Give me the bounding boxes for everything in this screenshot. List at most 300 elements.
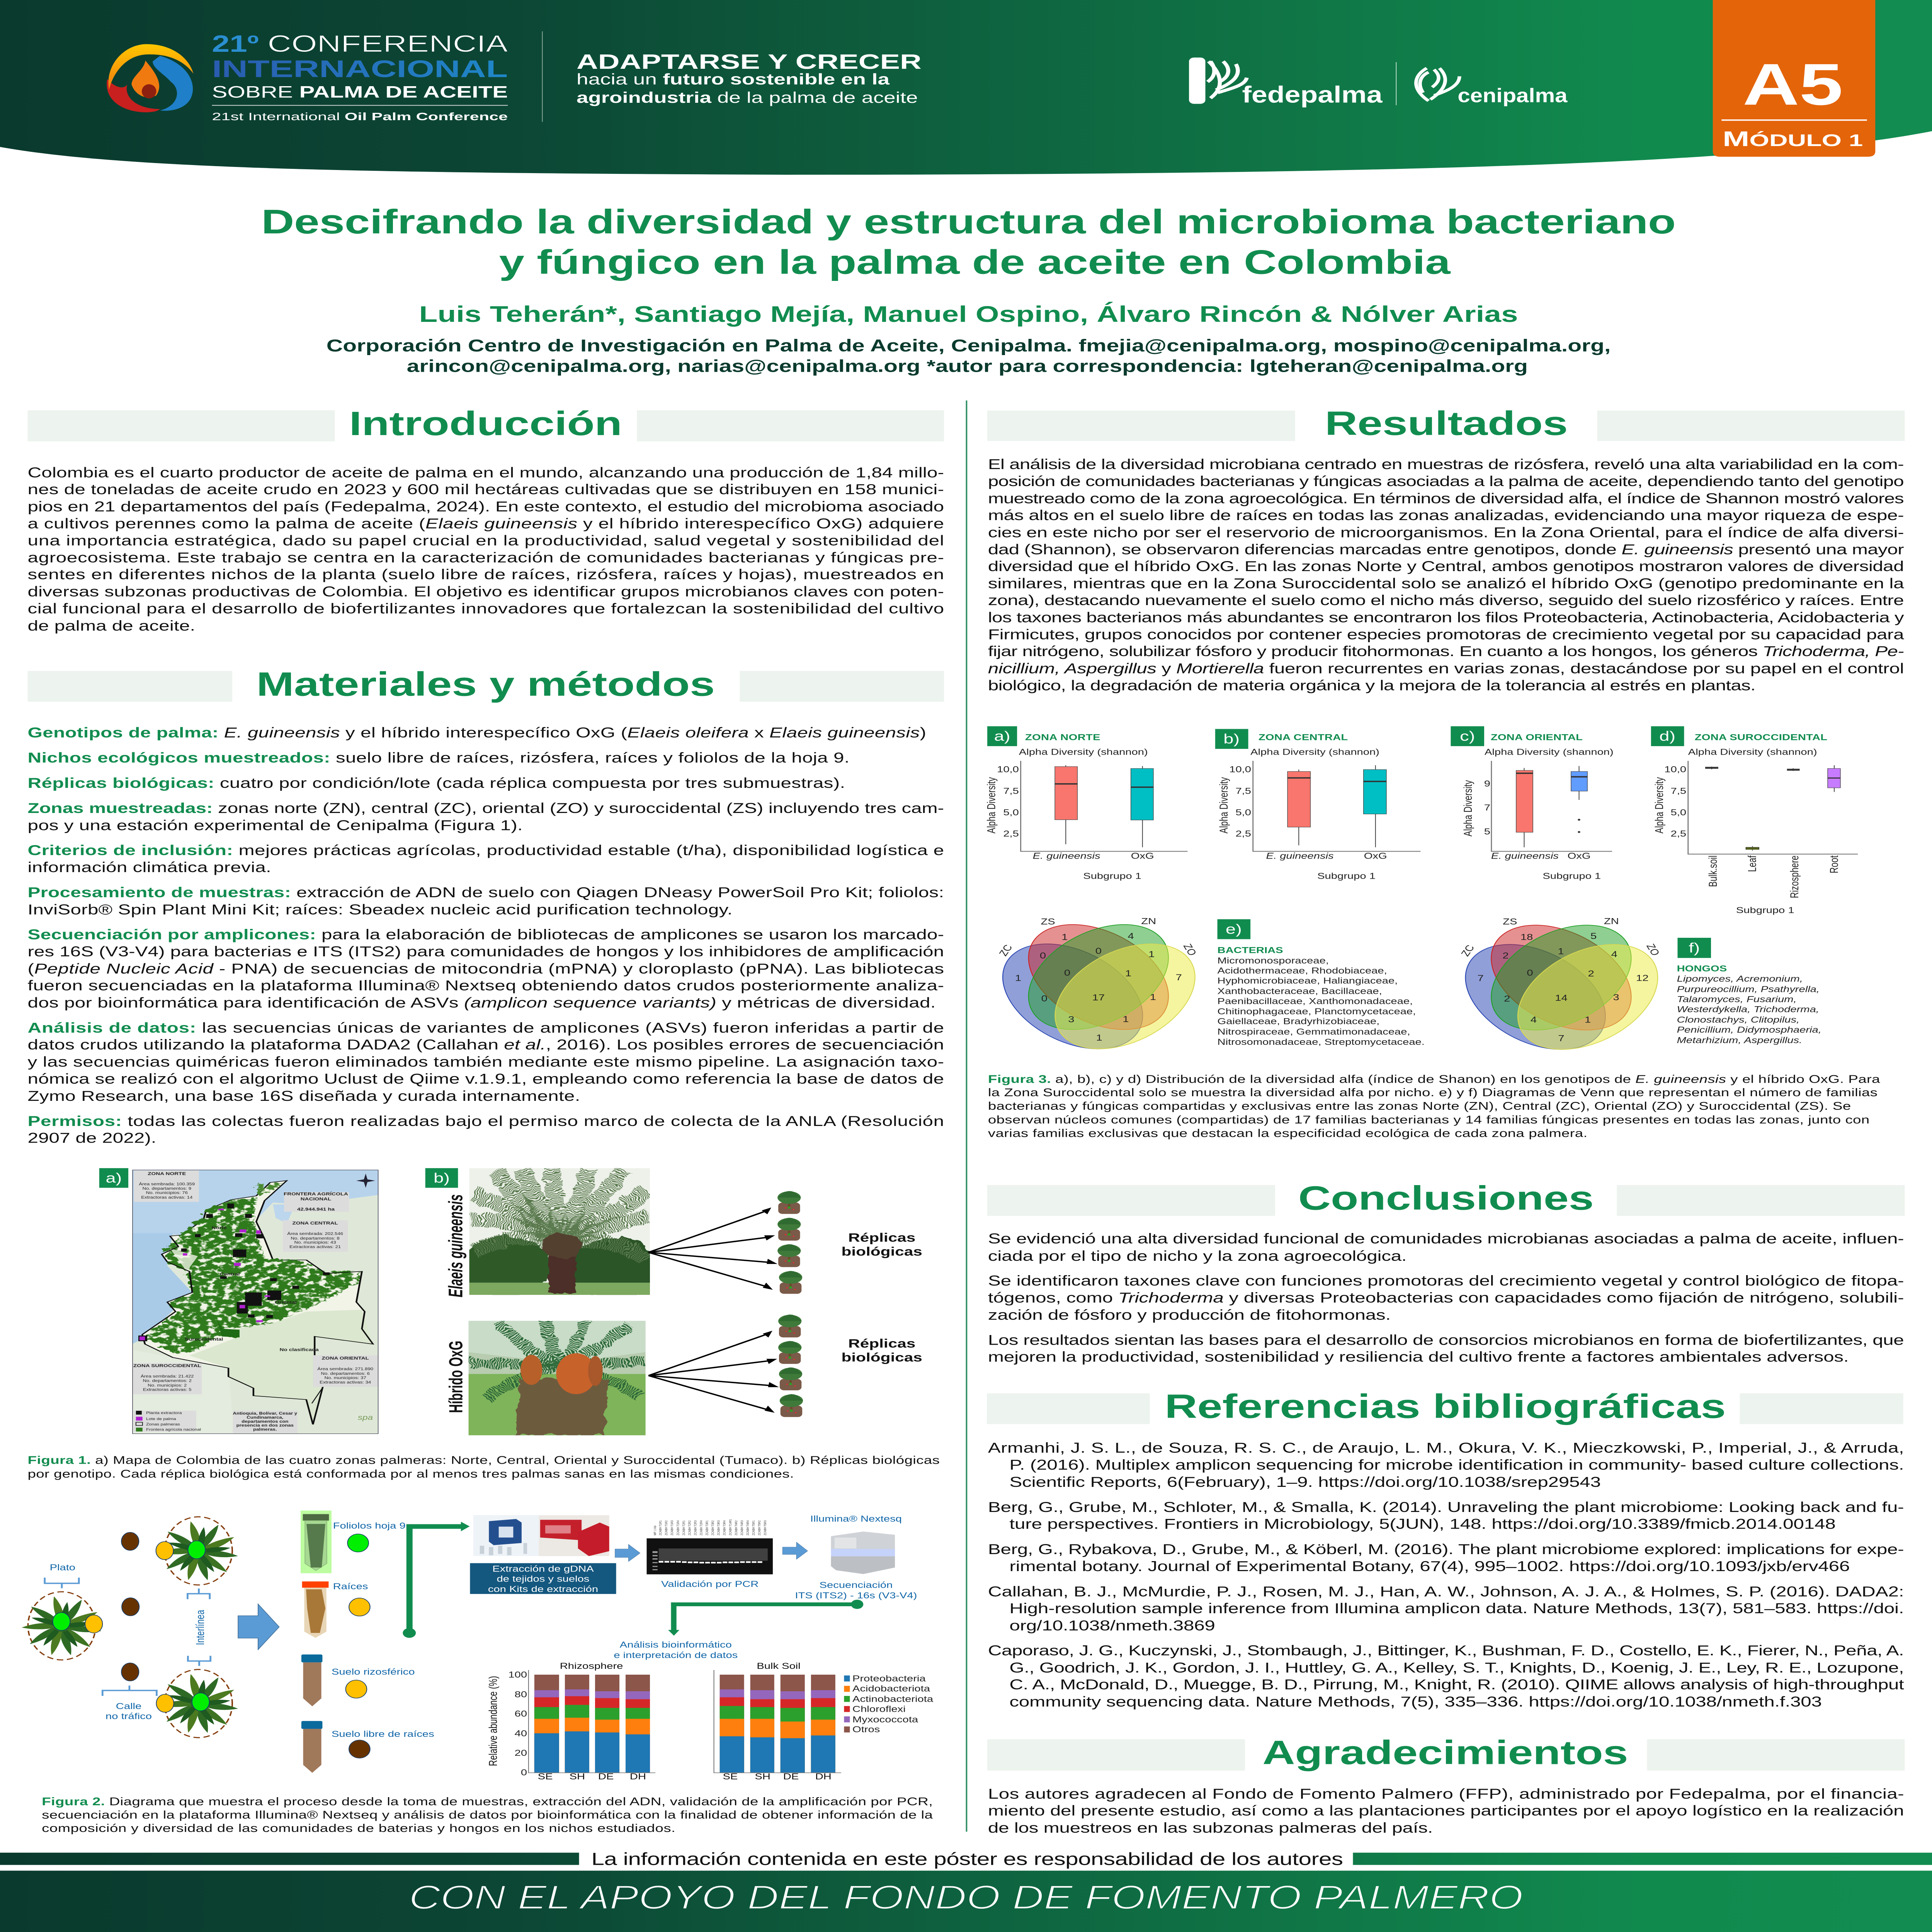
- chart legend: [844, 1674, 934, 1734]
- gel: PCR validation: ZCABH T4R4: [746, 1520, 750, 1535]
- list: bacterias: Nitrosomonadaceae, Streptomycetaceae.: [1218, 1038, 1425, 1047]
- venn diagram f: hongos: ZN: [1604, 917, 1619, 926]
- map of Colombia: No clasificada: [280, 1347, 319, 1352]
- gel: PCR validation: ZCABH T2R2: [687, 1520, 692, 1535]
- venn diagram f: hongos: 2: [1504, 994, 1510, 1003]
- text: introduction body: nes de toneladas de aceite crudo en 2023 y 600 mil hectáreas cultivadas que se distribuyen en 158 munici-: [27, 481, 944, 498]
- list: hongos: HONGOS: [1677, 964, 1727, 973]
- map of Colombia: FRONTERA AGRÍCOLA: [284, 1192, 348, 1196]
- badge: A5 module: A5: [1743, 51, 1843, 117]
- gel: PCR validation: ZCABH T5R1: [752, 1520, 755, 1535]
- boxplot a: zona norte: E. guineensis: [1033, 852, 1100, 861]
- boxplot d: zona suroccidental: Rizosphere: [1789, 855, 1801, 898]
- map of Colombia: Frontera agrícola nacional: [146, 1428, 201, 1432]
- venn diagram f: hongos: 2: [1502, 951, 1509, 961]
- venn diagram f: hongos: 7: [1558, 1034, 1565, 1043]
- panel: agradecimientos: [987, 1733, 1905, 1836]
- footer disclaimer: La información contenida en este póster es responsabilidad de los autores: [592, 1850, 1343, 1869]
- gel: PCR validation: ZCABH T3R2: [711, 1520, 715, 1535]
- text: results body: dad (Shannon), se observaron diferencias marcadas entre genotipos, donde E. guineensis presentó una mayor: [988, 541, 1904, 558]
- list: bacterias: Micromonosporaceae,: [1218, 956, 1329, 965]
- text: introduction body: agroecosistema. Este trabajo se centra en la caracterización de comunidades bacterianas y fúngicas pre-: [27, 549, 944, 566]
- bar chart: rhizosphere: DE: [598, 1772, 614, 1781]
- venn diagram e: bacterias: 4: [1128, 932, 1134, 941]
- text: methods list: Zonas muestreadas: zonas norte (ZN), central (ZC), oriental (ZO) y suroccidental (ZS) incluyendo tres cam-: [27, 800, 944, 816]
- boxplot d: zona suroccidental: Alpha Diversity: [1653, 777, 1666, 833]
- sequencer: ITS (ITS2) - 16s (V3-V4): [795, 1591, 917, 1600]
- venn diagram f: hongos: 0: [1527, 968, 1533, 978]
- caption: figura 2: composición y diversidad de las comunidades de baterias y hongos en los nichos estudiados.: [42, 1822, 675, 1835]
- venn diagram e: bacterias: 1: [1061, 933, 1068, 942]
- icons: replicate palms 2: [778, 1315, 803, 1417]
- map of Colombia: presencia en dos zonas: [236, 1423, 294, 1428]
- arrows: replicate group 2: [648, 1332, 776, 1412]
- map of Colombia: Área sembrada: 202.546: [287, 1232, 343, 1236]
- gel: PCR validation: ZCABH T2R3: [694, 1520, 697, 1535]
- text: methods list: y las secuencias quiméricas fueron eliminados también mediante este mismo pipeline. La asignación taxo-: [27, 1054, 944, 1070]
- label box: gDNA extraction: con Kits de extracción: [488, 1585, 598, 1594]
- map of Colombia: Planta extractora: [146, 1411, 182, 1415]
- text: conclusions: mejoren la productividad, sostenibilidad y resiliencia del cultivo frente a factores ambientales adversos.: [988, 1349, 1849, 1365]
- text: introduction body: cial funcional para el desarrollo de biofertilizantes innovadores que fortalezcan la sostenibilidad del cultivo: [27, 600, 944, 617]
- bar chart: rhizosphere: 80: [515, 1690, 527, 1699]
- boxplot d: zona suroccidental: 7,5: [1671, 787, 1686, 796]
- sequencer: [795, 1515, 917, 1600]
- list: bacterias: Nitrospiraceae, Gemmatimonadaceae,: [1218, 1027, 1410, 1037]
- venn diagram f: hongos: 3: [1613, 993, 1619, 1002]
- panel: introducción: [27, 405, 944, 634]
- boxplot d: zona suroccidental: Alpha Diversity (shannon): [1688, 748, 1817, 757]
- icons: replicate palms 1: [777, 1191, 802, 1294]
- figure 2: process diagram: [22, 1510, 934, 1781]
- venn diagram e: bacterias: 0: [1041, 994, 1048, 1003]
- map of Colombia: Extractoras activas: 5: [143, 1388, 192, 1392]
- venn diagram f: hongos: ZC: [1459, 944, 1477, 958]
- boxplot c: zona oriental: OxG: [1568, 852, 1591, 861]
- map of Colombia: palmeras.: [253, 1427, 277, 1432]
- venn diagram e: bacterias: 0: [1095, 947, 1102, 956]
- footer disclaimer: [0, 1850, 1932, 1869]
- text: results body: posición de comunidades bacterianas y fúngicas asociadas a la palma de aceite, dependiendo tanto del genotipo: [988, 473, 1904, 489]
- boxplot d: zona suroccidental: [1651, 726, 1858, 915]
- panel: conclusiones: [987, 1179, 1905, 1365]
- bar chart: bulk soil: DH: [815, 1772, 832, 1781]
- plantation sampling scheme: Calle: [116, 1702, 141, 1711]
- venn diagram e: bacterias: 17: [1092, 993, 1105, 1002]
- samples column: [301, 1510, 434, 1773]
- list: hongos: [1677, 938, 1821, 1045]
- map of Colombia: Área sembrada: 100.359: [139, 1182, 195, 1186]
- text: methods list: pos y una estación experimental de Cenipalma (Figura 1).: [27, 817, 523, 833]
- photo: Elaeis guineensis palm: [469, 1168, 650, 1295]
- text: conclusions: ciada por el tipo de nicho y la zona agroecológica.: [988, 1248, 1407, 1264]
- venn diagram f: hongos: 12: [1636, 974, 1648, 983]
- sequencer: Illumina® Nextesq: [810, 1515, 902, 1524]
- venn diagram e: bacterias: 1: [1096, 1033, 1102, 1043]
- text: methods list: [27, 724, 944, 1146]
- bar chart: rhizosphere: 20: [515, 1749, 527, 1758]
- map of Colombia: departamentos con: [242, 1420, 288, 1424]
- boxplot d: zona suroccidental: ZONA SUROCCIDENTAL: [1695, 733, 1827, 742]
- boxplot b: zona central: 10,0: [1229, 765, 1251, 774]
- bar chart: bulk soil: DE: [783, 1772, 799, 1781]
- text: conclusions: tógenos, como Trichoderma y diversas Proteobacterias con capacidades como fijación de nitrógeno, solubili-: [988, 1290, 1904, 1306]
- boxplot a: zona norte: 10,0: [997, 765, 1019, 774]
- chart legend: Acidobacteriota: [852, 1684, 930, 1694]
- venn diagram e: bacterias: 0: [1040, 951, 1046, 961]
- text: acknowledgements: de los muestreos en las subzonas palmeras del país.: [988, 1820, 1433, 1836]
- text: results body: más altos en el suelo libre de raíces en todas las zonas analizadas, evidenciando una mayor riqueza de espe-: [988, 507, 1904, 524]
- venn diagram f: hongos: 18: [1520, 933, 1533, 942]
- text: results body: los taxones bacterianos más abundantes se encontraron los filos Proteobacteria, Actinobacteria, Acidobacteria y: [988, 610, 1904, 626]
- sequencer: Secuenciación: [820, 1581, 893, 1590]
- map of Colombia: [132, 1170, 379, 1434]
- venn diagram f: hongos: 5: [1590, 932, 1597, 941]
- text: acknowledgements: miento del presente estudio, así como a las plantaciones participantes por el apoyo logístico en la realización: [988, 1803, 1904, 1819]
- text: introduction body: sentes en diferentes nichos de la planta (suelo libre de raíces, rizósfera, raíces y hojas), muestreados en: [27, 566, 944, 583]
- bar chart: bulk soil: SE: [723, 1772, 738, 1781]
- badge: b: b): [434, 1170, 450, 1185]
- text: acknowledgements: Los autores agradecen al Fondo de Fomento Palmero (FFP), administrado por Fedepalma, por el financia-: [988, 1786, 1904, 1802]
- venn diagram e: bacterias: 1: [1122, 1015, 1129, 1024]
- boxplot b: zona central: ZONA CENTRAL: [1259, 733, 1348, 742]
- venn diagram f: hongos: 14: [1555, 993, 1568, 1003]
- venn diagram e: bacterias: 3: [1068, 1015, 1074, 1024]
- venn diagram f: hongos: [1438, 905, 1685, 1070]
- boxplot a: zona norte: 5,0: [1003, 808, 1019, 817]
- text: methods list: nómica se realizó con el algoritmo Uclust de Qiime v.1.9.1, empleando como referencia la base de datos de: [27, 1071, 944, 1087]
- heading: referencias: Referencias bibliográficas: [1165, 1387, 1726, 1425]
- gel: PCR validation: ZCABH T1R2: [664, 1520, 668, 1535]
- map of Colombia: Oriental: [275, 1300, 297, 1304]
- caption: figura 3: bacterianas y fúngicas compartidas y exclusivas entre las zonas Norte (ZN), Central (ZC), Oriental (ZO) y Suroccidental (ZS). Se: [988, 1100, 1851, 1112]
- bar chart: rhizosphere: 60: [515, 1709, 527, 1719]
- slogan: agroindustria de la palma de aceite: [577, 89, 918, 106]
- text: conclusions: [988, 1231, 1904, 1365]
- caption: figura 3: la Zona Suroccidental solo se muestra la diversidad alfa por nicho. e) y f) Diagramas de Venn que representan el número de familias: [988, 1086, 1878, 1099]
- text: reference list: High-resolution sample inference from Illumina amplicon data. Nature Methods, 13(7), 581–583. https://doi.: [1009, 1600, 1904, 1617]
- heading: agradecimientos: [987, 1733, 1905, 1771]
- title: Descifrando la diversidad y estructura del microbioma bacteriano: [261, 203, 1676, 241]
- boxplot c: zona oriental: 7: [1484, 803, 1490, 813]
- boxplot c: zona oriental: Alpha Diversity: [1462, 780, 1475, 837]
- venn diagram f: hongos: ZO: [1644, 942, 1662, 957]
- text: results body: muestreado como de la zona agroecológica. En términos de diversidad alfa, el índice de Shannon mostró valores: [988, 490, 1904, 507]
- bar chart: rhizosphere: [487, 1662, 655, 1781]
- boxplot d: zona suroccidental: Subgrupo 1: [1736, 906, 1794, 915]
- label: bioinformatic analysis: e interpretación de datos: [614, 1651, 738, 1660]
- bar chart: rhizosphere: DH: [630, 1772, 646, 1781]
- plantation sampling scheme: no tráfico: [105, 1712, 152, 1721]
- list: bacterias: Acidothermaceae, Rhodobiaceae,: [1218, 966, 1387, 975]
- samples column: Raíces: [333, 1582, 368, 1591]
- boxplot a: zona norte: a): [994, 728, 1010, 744]
- boxplot a: zona norte: Alpha Diversity (shannon): [1019, 748, 1148, 757]
- text: methods list: Criterios de inclusión: mejores prácticas agrícolas, productividad estable (t/ha), disponibilidad logística e: [27, 842, 944, 859]
- logo: cenipalma: cenipalma: [1458, 85, 1568, 107]
- boxplot b: zona central: Alpha Diversity: [1218, 777, 1230, 833]
- text: introduction body: una importancia estratégica, dado su papel crucial en la productividad, salud vegetal y sostenibilidad del: [27, 533, 944, 549]
- gel: PCR validation: ZCABH T3R1: [705, 1520, 709, 1535]
- plantation sampling scheme: Interlínea: [194, 1610, 207, 1645]
- text: methods list: Procesamiento de muestras: extracción de ADN de suelo con Qiagen DNeasy PowerSoil Pro Kit; foliolos:: [27, 884, 944, 900]
- photo: extraction kits: [473, 1515, 609, 1556]
- bar chart: rhizosphere: 0: [521, 1768, 527, 1777]
- gel: PCR validation: ZCABH T1R4: [676, 1520, 680, 1535]
- list: hongos: Lipomyces, Acremonium,: [1677, 975, 1803, 984]
- panel: resultados: [987, 404, 1905, 694]
- caption: figura 2: [42, 1795, 933, 1835]
- arrows: replicate group 1: [648, 1209, 775, 1289]
- gel: PCR validation: ZCABH T2R4: [699, 1520, 703, 1535]
- bar chart: bulk soil: SH: [755, 1772, 770, 1781]
- boxplot a: zona norte: Alpha Diversity: [986, 777, 998, 833]
- title: y fúngico en la palma de aceite en Colombia: [499, 243, 1451, 281]
- text: reference list: community sequencing data. Nature Methods, 7(5), 335–336. https://doi.org/10.1038/nmeth.f.303: [1009, 1694, 1822, 1710]
- map of Colombia: ZONA SUROCCIDENTAL: [133, 1363, 201, 1368]
- text: introduction body: pios en 21 departamentos del país (Fedepalma, 2024). En este contexto, el estudio del microbioma asociado: [27, 498, 944, 515]
- bar chart: rhizosphere: Rhizosphere: [560, 1662, 623, 1671]
- venn diagram f: hongos: ZS: [1503, 917, 1517, 926]
- list: bacterias: Hyphomicrobiaceae, Haliangiaceae,: [1218, 976, 1398, 986]
- boxplot b: zona central: 7,5: [1235, 787, 1251, 796]
- venn diagram e: bacterias: 1: [1125, 969, 1131, 978]
- list: hongos: Westerdykella, Trichoderma,: [1677, 1005, 1819, 1014]
- caption: figura 3: varias familias exclusivas que destacan la especificidad ecológica de cada zona palmera.: [988, 1127, 1587, 1139]
- text: reference list: Berg, G., Rybakova, D., Grube, M., & Köberl, M. (2016). The plant microbiome explored: implications for expe-: [988, 1541, 1904, 1558]
- arrow: samples: [238, 1604, 279, 1650]
- caption: figura 1: por genotipo. Cada réplica biológica está conformada por al menos tres palmas sanas en las mismas condiciones.: [27, 1468, 794, 1480]
- boxplot a: zona norte: 2,5: [1003, 830, 1019, 838]
- map of Colombia: No. departamentos: 9: [143, 1186, 191, 1190]
- bar chart: bulk soil: Bulk Soil: [757, 1662, 801, 1671]
- text: results body: biológico, la degradación de materia orgánica y la mejora de la tolerancia al estrés en plantas.: [988, 677, 1756, 694]
- boxplot c: zona oriental: E. guineensis: [1491, 852, 1559, 861]
- text: results body: El análisis de la diversidad microbiana centrado en muestras de rizósfera, reveló una alta variabilidad en la com-: [988, 456, 1904, 473]
- affiliations: [327, 336, 1611, 376]
- heading: materiales y métodos: Materiales y métodos: [257, 665, 715, 703]
- gel: PCR validation: MP. 1 Kb: [653, 1526, 657, 1535]
- chart legend: Myxococcota: [852, 1715, 918, 1725]
- text: methods list: Secuenciación por amplicones: para la elaboración de bibliotecas de amplicones se usaron los marcado-: [27, 927, 944, 943]
- text: reference list: Scientific Reports, 6(February), 1–9. https://doi.org/10.1038/srep29543: [1009, 1474, 1601, 1490]
- gel: PCR validation: ZCABH T1R1: [658, 1520, 662, 1535]
- boxplot c: zona oriental: Subgrupo 1: [1543, 872, 1601, 881]
- list: hongos: f): [1689, 940, 1700, 956]
- text: conclusions: zación de fósforo y producción de fitohormonas.: [988, 1307, 1391, 1323]
- conference name: INTERNACIONAL: [212, 56, 508, 82]
- conference name: 21st International Oil Palm Conference: [212, 111, 508, 123]
- map of Colombia: No. municipios: 2: [148, 1383, 187, 1388]
- map of Colombia: No. municipios: 43: [294, 1240, 336, 1245]
- logo: fedepalma: fedepalma: [1242, 82, 1383, 108]
- venn diagram f: hongos: 7: [1477, 974, 1484, 983]
- map of Colombia: No. municipios: 76: [146, 1191, 188, 1195]
- venn diagram f: hongos: 1: [1585, 1015, 1591, 1024]
- badge: A5 module: [1713, 0, 1875, 157]
- list: bacterias: Xanthobacteraceae, Bacillaceae,: [1218, 987, 1382, 996]
- text: introduction body: Colombia es el cuarto productor de aceite de palma en el mundo, alcanzando una producción de 1,84 millo-: [27, 464, 944, 481]
- boxplot b: zona central: b): [1223, 731, 1240, 747]
- venn diagram e: bacterias: ZS: [1041, 917, 1055, 926]
- list: bacterias: [1218, 919, 1425, 1047]
- boxplot a: zona norte: OxG: [1131, 852, 1154, 861]
- boxplot c: zona oriental: 9: [1484, 779, 1490, 789]
- conference name: SOBRE PALMA DE ACEITE: [212, 83, 508, 101]
- venn diagram e: bacterias: 7: [1176, 973, 1182, 982]
- map of Colombia: ZONA ORIENTAL: [322, 1355, 369, 1361]
- boxplot b: zona central: Subgrupo 1: [1317, 872, 1376, 881]
- arrow: to sequencing: [782, 1542, 808, 1560]
- heading: resultados: Resultados: [1325, 404, 1568, 442]
- venn diagram f: hongos: 4: [1531, 1015, 1537, 1024]
- logo: fedepalma: [1189, 58, 1383, 108]
- authors: Luis Teherán*, Santiago Mejía, Manuel Ospino, Álvaro Rincón & Nólver Arias: [419, 302, 1518, 327]
- text: conclusions: Se identificaron taxones clave con funciones promotoras del crecimiento vegetal y control biológico de fitopa-: [988, 1273, 1904, 1289]
- boxplot c: zona oriental: c): [1460, 728, 1475, 744]
- arrow: to PCR: [615, 1544, 640, 1561]
- map of Colombia: spa: [358, 1413, 373, 1422]
- list: hongos: Purpureocillium, Psathyrella,: [1677, 985, 1820, 994]
- caption: figura 3: [988, 1073, 1880, 1139]
- heading: materiales y métodos: [27, 665, 944, 703]
- boxplot d: zona suroccidental: 5,0: [1671, 808, 1686, 817]
- boxplot d: zona suroccidental: Bulk.soil: [1707, 855, 1719, 887]
- chart legend: Chloroflexi: [852, 1705, 906, 1714]
- plantation sampling scheme: [22, 1517, 238, 1738]
- gel: PCR validation: ZCABH T4R2: [734, 1520, 738, 1535]
- map of Colombia: Norte: [212, 1225, 227, 1230]
- slogan: [577, 50, 922, 106]
- gel: PCR validation: ZCABH T2R1: [682, 1520, 686, 1535]
- text: methods list: (Peptide Nucleic Acid - PNA) de secuencias de mitocondria (mPNA) y cloroplasto (pPNA). Las bibliotecas: [27, 961, 944, 977]
- chart legend: Otros: [852, 1725, 880, 1734]
- venn diagram e: bacterias: 1: [1150, 993, 1156, 1002]
- label: réplicas biológicas 1: biológicas: [842, 1245, 922, 1258]
- header band: [0, 0, 1932, 175]
- venn diagram e: bacterias: 0: [1064, 968, 1070, 978]
- boxplot d: zona suroccidental: 10,0: [1664, 765, 1686, 774]
- boxplot b: zona central: [1215, 729, 1420, 881]
- text: conclusions: Se evidenció una alta diversidad funcional de comunidades microbianas asociadas a palma de aceite, influen-: [988, 1231, 1904, 1247]
- map of Colombia: Zonas palmeras: [146, 1423, 180, 1427]
- text: introduction body: diversas subzonas productivas de Colombia. El objetivo es identificar grupos microbianos claves con poten-: [27, 584, 944, 600]
- label: bioinformatic analysis: Análisis bioinformático: [620, 1640, 732, 1650]
- venn diagram e: bacterias: ZC: [997, 943, 1015, 957]
- venn diagram f: hongos: 4: [1611, 950, 1617, 959]
- heading: resultados: [987, 404, 1905, 442]
- text: reference list: C. A., McDonald, D., Muegge, B. D., Pirrung, M., Knight, R. (2010). QIIME allows analysis of high-throughput: [1009, 1677, 1904, 1693]
- map of Colombia: NACIONAL: [301, 1196, 331, 1201]
- venn diagram f: hongos: 1: [1558, 947, 1564, 956]
- gel: PCR validation: ZCABH T5R3: [763, 1520, 767, 1535]
- boxplot a: zona norte: ZONA NORTE: [1025, 733, 1100, 742]
- samples column: Foliolos hoja 9: [333, 1521, 406, 1531]
- samples column: Suelo rizosférico: [332, 1667, 415, 1677]
- text: reference list: Callahan, B. J., McMurdie, P. J., Rosen, M. J., Han, A. W., Johnson, A. J. A., & Holmes, S. P. (2016). DADA2:: [988, 1583, 1904, 1600]
- text: methods list: Análisis de datos: las secuencias únicas de variantes de amplicones (ASVs) fueron inferidas a partir de: [27, 1020, 944, 1036]
- boxplot d: zona suroccidental: d): [1659, 728, 1675, 744]
- label box: gDNA extraction: [470, 1563, 616, 1594]
- text: reference list: ture perspectives. Frontiers in Microbiology, 5(JUN), 148. https://doi.org/10.3389/fmicb.2014.00148: [1009, 1516, 1836, 1532]
- venn diagram f: hongos: 2: [1588, 969, 1594, 978]
- text: reference list: P. (2016). Multiplex amplicon sequencing for microbe identification in community- based culture collections.: [1009, 1457, 1904, 1473]
- boxplot b: zona central: 2,5: [1235, 830, 1251, 838]
- label box: gDNA extraction: de tejidos y suelos: [497, 1575, 589, 1584]
- caption: figura 1: Figura 1. a) Mapa de Colombia de las cuatro zonas palmeras: Norte, Central, Oriental y Suroccidental (Tumaco). b) Réplicas biológicas: [27, 1454, 940, 1466]
- heading: conclusiones: Conclusiones: [1298, 1179, 1594, 1217]
- gel: PCR validation: ZCABH T14R1: [728, 1519, 732, 1535]
- heading: introducción: Introducción: [349, 405, 622, 442]
- label: réplicas biológicas 1: Réplicas: [848, 1231, 915, 1244]
- caption: figura 2: Figura 2. Diagrama que muestra el proceso desde la toma de muestras, extracción del ADN, validación de la amplificación por PCR,: [42, 1795, 933, 1808]
- boxplot c: zona oriental: 5: [1484, 827, 1490, 837]
- boxplot d: zona suroccidental: 2,5: [1671, 830, 1686, 838]
- boxplot c: zona oriental: Alpha Diversity (shannon): [1485, 748, 1614, 757]
- boxplot a: zona norte: [986, 726, 1187, 881]
- chart legend: Proteobacteria: [852, 1674, 926, 1684]
- text: reference list: G., Goodrich, J. K., Gordon, J. I., Huttley, G. A., Kelley, S. T., Knights, D., Koenig, J. E., Ley, R. E., Lozupone,: [1009, 1660, 1904, 1676]
- map of Colombia: Área sembrada: 271.890: [317, 1367, 374, 1371]
- gel: PCR validation: Validación por PCR: [661, 1580, 759, 1589]
- plantation sampling scheme: Plato: [50, 1563, 75, 1572]
- heading: referencias: [987, 1387, 1903, 1425]
- boxplot a: zona norte: Subgrupo 1: [1083, 872, 1141, 881]
- bar chart: rhizosphere: 40: [515, 1729, 527, 1738]
- title: [261, 203, 1676, 281]
- gel: PCR validation: ZCABH T3R3: [717, 1520, 721, 1535]
- text: methods list: datos crudos utilizando la plataforma DADA2 (Callahan et al., 2016). Los posibles errores de secuenciación: [27, 1037, 944, 1053]
- text: reference list: Armanhi, J. S. L., de Souza, R. S. C., de Araujo, L. M., Okura, V. K., Mieczkowski, P., Imperial, J., & Arruda,: [988, 1440, 1904, 1456]
- label: réplicas biológicas 1: [842, 1231, 922, 1258]
- map of Colombia: Extractoras activas: 21: [289, 1245, 341, 1249]
- text: conclusions: Los resultados sientan las bases para el desarrollo de consorcios microbianos en forma de biofertilizantes, que: [988, 1332, 1904, 1348]
- text: methods list: 2907 de 2022).: [27, 1130, 156, 1146]
- text: methods list: Réplicas biológicas: cuatro por condición/lote (cada réplica compuesta por tres submuestras).: [27, 775, 845, 791]
- list: bacterias: Gaiellaceae, Bradyrhizobiaceae,: [1218, 1017, 1379, 1026]
- text: methods list: Permisos: todas las colectas fueron realizadas bajo el permiso marco de colecta de la ANLA (Resolución: [27, 1113, 944, 1129]
- list: bacterias: BACTERIAS: [1218, 946, 1283, 955]
- samples column: Suelo libre de raíces: [332, 1730, 434, 1739]
- map of Colombia: Área sembrada: 21.422: [141, 1374, 194, 1379]
- map of Colombia: Extractoras activas: 14: [141, 1196, 193, 1200]
- arrow: green connector to kits: [403, 1522, 469, 1638]
- text: methods list: dos por bioinformática para identificación de ASVs (amplicon sequence variants) y métricas de diversidad.: [27, 995, 935, 1011]
- venn diagram e: bacterias: 1: [1015, 974, 1021, 983]
- map of Colombia: No. departamentos: 6: [321, 1371, 370, 1376]
- slogan: hacia un futuro sostenible en la: [577, 71, 890, 88]
- chart legend: Actinobacteriota: [852, 1695, 934, 1704]
- bar chart: rhizosphere: SE: [538, 1772, 553, 1781]
- affiliations: Corporación Centro de Investigación en Palma de Aceite, Cenipalma. fmejia@cenipalma.org, mospino@cenipalma.org,: [327, 336, 1611, 355]
- affiliations: arincon@cenipalma.org, narias@cenipalma.org *autor para correspondencia: lgteheran@cenipalma.org: [407, 357, 1528, 376]
- map of Colombia: No. departamentos: 8: [291, 1236, 340, 1241]
- text: results body: [988, 456, 1904, 694]
- label box: gDNA extraction: Extracción de gDNA: [492, 1565, 594, 1573]
- label: bioinformatic analysis: [614, 1640, 738, 1660]
- gel: PCR validation: ZCABH T1R3: [670, 1520, 674, 1535]
- venn diagram e: bacterias: ZO: [1181, 942, 1199, 957]
- boxplot b: zona central: OxG: [1364, 852, 1387, 861]
- map of Colombia: Lote de palma: [146, 1417, 176, 1421]
- label: réplicas biológicas 2: Réplicas: [848, 1337, 915, 1350]
- heading: conclusiones: [987, 1179, 1905, 1217]
- badge: a: [99, 1168, 128, 1188]
- text: introduction body: de palma de aceite.: [27, 618, 195, 634]
- logo: cenipalma: [1416, 68, 1568, 107]
- map of Colombia: ZONA CENTRAL: [293, 1221, 338, 1226]
- text: methods list: Genotipos de palma: E. guineensis y el híbrido interespecífico OxG (Elaeis oleifera x Elaeis guineensis): [27, 724, 926, 741]
